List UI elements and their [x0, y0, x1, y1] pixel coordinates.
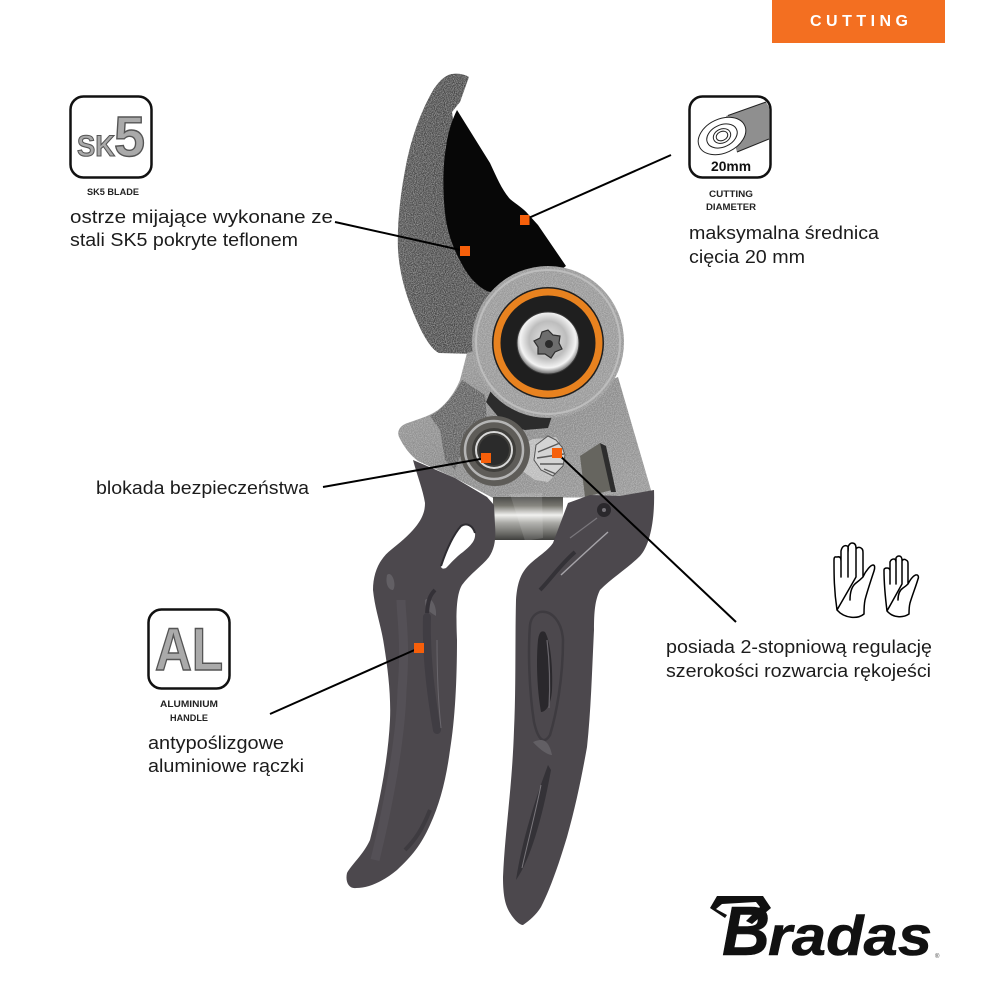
hinge spring cylinder	[493, 493, 563, 541]
label: CUTTING DIAMETER: DIAMETER	[706, 202, 757, 212]
pivot ring with orange washer and screw	[472, 266, 624, 418]
black teflon cutting edge	[443, 110, 566, 300]
text: SK5 blade description	[70, 207, 333, 250]
callout: adjustment line	[557, 453, 736, 622]
darker recess on jaw	[430, 380, 487, 470]
text: safety lock: blokada bezpieczeństwa	[96, 478, 310, 498]
logo: Bradas: B	[722, 892, 770, 970]
icon: cutting diameter 20mm: 20mm	[711, 159, 751, 174]
text: cutting diameter description	[689, 223, 880, 267]
text: cutting diameter description: maksymalna średnica	[689, 223, 880, 243]
text: handle description: aluminiowe rączki	[148, 756, 304, 776]
callout: safety lock line	[323, 458, 486, 487]
text: cutting diameter description: cięcia 20 mm	[689, 247, 805, 267]
marker: cutting edge	[520, 215, 530, 225]
lower jaw and frame	[398, 350, 653, 498]
small hand	[884, 556, 918, 617]
callout lines and orange markers	[270, 155, 736, 714]
label: ALUMINIUM HANDLE: HANDLE	[170, 713, 208, 723]
text: grip adjustment description: posiada 2-stopniową regulację	[666, 637, 932, 657]
category banner: CUTTING: CUTTING	[810, 13, 908, 30]
label: ALUMINIUM HANDLE: ALUMINIUM	[160, 699, 218, 709]
right grey handle	[503, 490, 654, 925]
logo: Bradas: ®	[935, 953, 940, 960]
adjustment slot	[580, 443, 612, 497]
left grey handle	[346, 460, 495, 888]
text: grip adjustment description: szerokości rozwarcia rękojeści	[666, 661, 931, 681]
category banner: CUTTING	[772, 0, 945, 43]
marker: safety lock	[481, 453, 491, 463]
label: SK5 BLADE: SK5 BLADE	[87, 187, 139, 197]
marker: handle	[414, 643, 424, 653]
marker: blade	[460, 246, 470, 256]
marker: adjustment	[552, 448, 562, 458]
text: handle description: antypoślizgowe	[148, 733, 284, 753]
icon: SK5 blade	[70, 96, 152, 178]
pruning shears product illustration	[346, 74, 654, 925]
text: grip adjustment description	[666, 637, 932, 681]
text: SK5 blade description: stali SK5 pokryte teflonem	[70, 230, 298, 250]
callout: SK5 blade line	[335, 222, 465, 251]
text: SK5 blade description: ostrze mijające wykonane ze	[70, 207, 333, 227]
icon: SK5 blade: 5	[114, 105, 145, 169]
label: CUTTING DIAMETER	[706, 189, 757, 212]
icon: two hands	[834, 543, 918, 617]
upper blade body	[398, 74, 500, 354]
icon: AL aluminium handle: AL	[155, 616, 223, 683]
safety lock button	[460, 416, 565, 486]
logo: Bradas	[710, 892, 940, 970]
callout: handle line	[270, 648, 419, 714]
icon: cutting diameter 20mm	[690, 96, 770, 178]
icon: SK5 blade: SK	[77, 130, 115, 163]
large hand	[834, 543, 875, 617]
label: ALUMINIUM HANDLE	[160, 699, 218, 723]
dark gap under pivot	[486, 388, 552, 430]
logo: Bradas: radas	[768, 904, 932, 967]
label: CUTTING DIAMETER: CUTTING	[709, 189, 753, 199]
callout: cutting diameter line	[524, 155, 671, 220]
text: handle description	[148, 733, 304, 776]
